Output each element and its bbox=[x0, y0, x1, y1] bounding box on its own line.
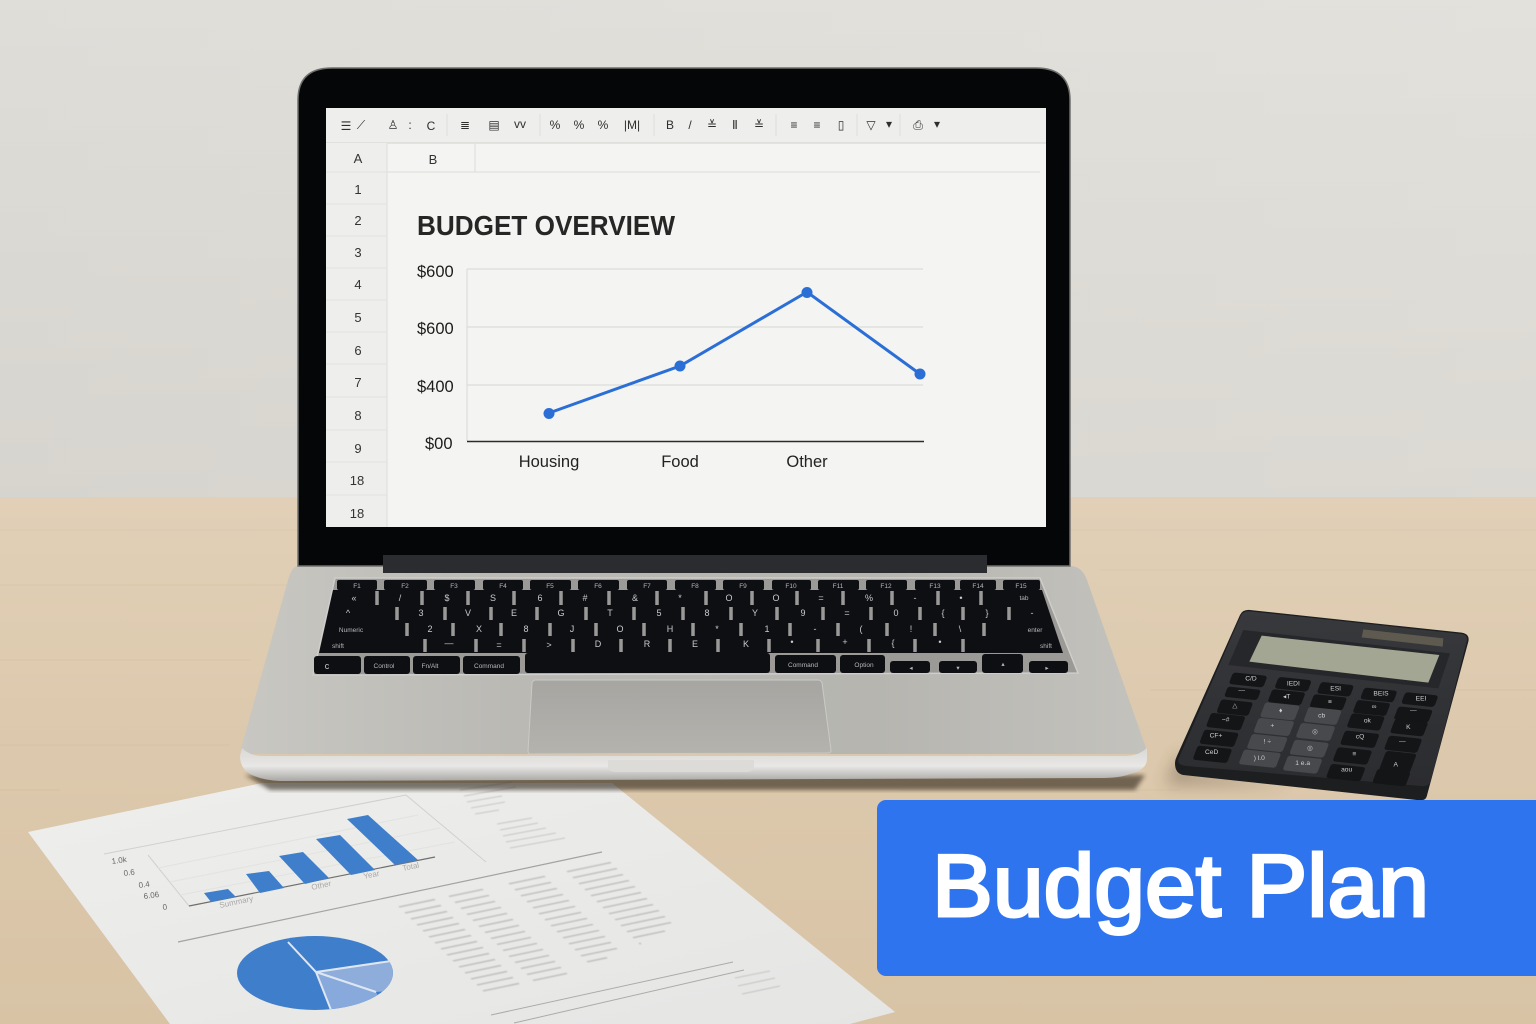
key labels: H bbox=[667, 624, 673, 634]
key labels: - bbox=[914, 593, 916, 603]
key labels: ◂ bbox=[909, 665, 913, 672]
calculator key labels: ) l.0 bbox=[1254, 755, 1265, 762]
line chart: Housing bbox=[519, 453, 579, 471]
key labels: = bbox=[844, 608, 850, 618]
key labels: - bbox=[814, 624, 816, 634]
spreadsheet toolbar: ≚ bbox=[707, 118, 717, 132]
function row keys bbox=[337, 580, 1040, 590]
calculator key labels: EEI bbox=[1416, 695, 1427, 702]
key labels: \ bbox=[959, 624, 962, 634]
key labels: F6 bbox=[594, 583, 602, 590]
pie chart on paper bbox=[237, 936, 393, 1010]
spreadsheet toolbar bbox=[326, 108, 1046, 143]
key labels: — bbox=[444, 638, 454, 648]
spreadsheet headers: 8 bbox=[354, 408, 362, 423]
key labels: R bbox=[644, 639, 651, 649]
laptop shadow bbox=[245, 775, 1145, 790]
key labels: / bbox=[399, 593, 402, 603]
key separators bbox=[377, 591, 1009, 652]
key labels: G bbox=[557, 608, 565, 618]
key labels: 5 bbox=[656, 608, 662, 618]
line chart: $400 bbox=[417, 378, 454, 396]
key labels: Option bbox=[854, 662, 874, 669]
key labels: • bbox=[959, 593, 963, 603]
data table on paper bbox=[399, 782, 780, 994]
key labels: O bbox=[772, 593, 780, 603]
calculator key labels: ◎ bbox=[1312, 728, 1318, 735]
calculator shadow bbox=[1165, 750, 1290, 785]
bar chart on paper: 0 bbox=[162, 902, 168, 912]
bar chart on paper bbox=[104, 795, 486, 912]
spreadsheet toolbar: Ⅱ bbox=[732, 118, 738, 132]
key labels: ( bbox=[860, 624, 862, 634]
table footer lines bbox=[491, 962, 744, 1023]
line chart bbox=[417, 263, 926, 471]
key labels: > bbox=[546, 640, 552, 650]
key labels: F8 bbox=[691, 583, 699, 590]
spreadsheet toolbar: ≣ bbox=[460, 118, 470, 132]
bar chart on paper: 0.6 bbox=[123, 867, 136, 878]
key labels: Fn/Alt bbox=[422, 663, 439, 670]
key labels: F14 bbox=[972, 583, 984, 590]
key labels: Control bbox=[374, 663, 395, 670]
key labels: shift bbox=[332, 643, 344, 650]
key labels: } bbox=[985, 608, 989, 618]
spreadsheet toolbar: ☰ bbox=[341, 119, 351, 133]
key labels: 3 bbox=[418, 608, 424, 618]
key labels: # bbox=[582, 593, 588, 603]
key labels: { bbox=[891, 638, 895, 648]
spreadsheet headers: 3 bbox=[354, 245, 362, 260]
spreadsheet toolbar: B bbox=[666, 118, 674, 132]
calculator key labels: ~# bbox=[1222, 717, 1230, 724]
spreadsheet headers: 9 bbox=[354, 441, 362, 456]
calculator key labels: aou bbox=[1341, 767, 1353, 774]
key labels: F13 bbox=[929, 583, 941, 590]
calculator key labels: ≡ bbox=[1352, 751, 1356, 758]
key labels: Numeric bbox=[339, 627, 364, 634]
spreadsheet toolbar: ♙ bbox=[388, 118, 398, 132]
key labels: F4 bbox=[499, 583, 507, 590]
key labels: F2 bbox=[401, 583, 409, 590]
spreadsheet headers: 4 bbox=[354, 277, 362, 292]
front lip bbox=[240, 748, 1147, 781]
key labels bbox=[325, 583, 1052, 672]
key labels: tab bbox=[1019, 595, 1029, 602]
hinge bbox=[383, 555, 987, 573]
key labels: $ bbox=[444, 593, 450, 603]
wall background bbox=[0, 0, 1536, 498]
key labels: E bbox=[511, 608, 517, 618]
divider on paper bbox=[178, 852, 602, 942]
banner title: Budget Plan bbox=[932, 836, 1429, 935]
key labels: D bbox=[595, 639, 602, 649]
key labels: 2 bbox=[427, 624, 433, 634]
calculator key labels: A bbox=[1393, 762, 1398, 769]
key labels: F7 bbox=[643, 583, 651, 590]
key labels: - bbox=[1030, 608, 1034, 618]
key labels: * bbox=[678, 593, 682, 603]
spreadsheet headers: 5 bbox=[354, 310, 362, 325]
spreadsheet toolbar: C bbox=[427, 119, 436, 133]
blue title banner bbox=[877, 800, 1536, 976]
calculator key labels: ◎ bbox=[1307, 745, 1313, 752]
key labels: S bbox=[490, 593, 496, 603]
spreadsheet headers: A bbox=[354, 151, 363, 166]
key labels: 6 bbox=[537, 593, 543, 603]
spreadsheet toolbar: vv bbox=[514, 117, 526, 131]
key labels: ▾ bbox=[956, 665, 960, 672]
spreadsheet toolbar: / bbox=[688, 118, 692, 132]
bar chart on paper: Summary bbox=[219, 894, 254, 910]
calculator key labels: — bbox=[1238, 688, 1245, 695]
line chart: $00 bbox=[425, 435, 453, 453]
laptop base bbox=[240, 566, 1147, 781]
key labels: X bbox=[476, 624, 482, 634]
spreadsheet headers: 7 bbox=[354, 375, 362, 390]
calculator key labels: 1 e.a bbox=[1295, 760, 1310, 767]
calculator key labels: BEIS bbox=[1373, 691, 1389, 698]
key labels: F11 bbox=[833, 583, 844, 590]
bar chart on paper: Total bbox=[402, 861, 420, 873]
key labels: F12 bbox=[880, 583, 892, 590]
key labels: * bbox=[715, 624, 719, 634]
spreadsheet headers: 2 bbox=[354, 213, 362, 228]
calculator key labels: ≡ bbox=[1328, 698, 1332, 705]
key labels: Command bbox=[474, 663, 504, 670]
key labels: F5 bbox=[546, 583, 554, 590]
calculator key labels: C/D bbox=[1245, 676, 1257, 683]
key labels: 9 bbox=[800, 608, 806, 618]
spreadsheet toolbar: % bbox=[598, 118, 609, 132]
calculator key labels: ♦ bbox=[1279, 707, 1283, 714]
spreadsheet toolbar: ⎙ bbox=[913, 118, 923, 132]
line chart: $600 bbox=[417, 263, 454, 281]
spreadsheet headers: 18 bbox=[350, 506, 364, 521]
calculator key labels: ESI bbox=[1330, 685, 1341, 692]
keyboard bbox=[313, 578, 1078, 675]
calculator key labels: + bbox=[1270, 723, 1274, 730]
key labels: 0 bbox=[893, 608, 899, 618]
key labels: K bbox=[743, 639, 749, 649]
wooden desk bbox=[0, 497, 1536, 1024]
key labels: Y bbox=[752, 608, 758, 618]
key labels: E bbox=[692, 639, 698, 649]
key labels: O bbox=[725, 593, 733, 603]
spreadsheet toolbar: % bbox=[550, 118, 561, 132]
calculator key labels: K bbox=[1406, 724, 1411, 731]
sheet of paper bbox=[28, 783, 895, 1024]
spreadsheet toolbar: ▤ bbox=[488, 118, 500, 132]
bar chart on paper: 1.0k bbox=[111, 855, 128, 866]
line chart: Other bbox=[786, 453, 828, 471]
key labels: « bbox=[351, 593, 357, 603]
key labels: 8 bbox=[523, 624, 529, 634]
key labels: V bbox=[465, 608, 471, 618]
calculator key labels: CF+ bbox=[1210, 732, 1222, 739]
line chart: Food bbox=[661, 453, 699, 471]
key labels: F1 bbox=[353, 583, 361, 590]
key labels: + bbox=[842, 637, 848, 647]
calculator key labels: IEDI bbox=[1287, 680, 1300, 687]
calculator key labels: CeD bbox=[1205, 749, 1219, 756]
key labels: O bbox=[616, 624, 624, 634]
spreadsheet toolbar: ≚ bbox=[754, 118, 764, 132]
key labels: % bbox=[865, 593, 873, 603]
key labels: F10 bbox=[785, 583, 797, 590]
spreadsheet headers bbox=[326, 143, 1040, 527]
key labels: shift bbox=[1040, 643, 1052, 650]
calculator bbox=[1175, 610, 1469, 800]
key labels: F9 bbox=[739, 583, 747, 590]
spreadsheet toolbar: ▾ bbox=[886, 117, 892, 131]
spreadsheet headers: 6 bbox=[354, 343, 362, 358]
screen bbox=[326, 108, 1046, 527]
key labels: F3 bbox=[450, 583, 458, 590]
key labels: ▸ bbox=[1045, 665, 1049, 672]
calculator key labels: cQ bbox=[1356, 733, 1364, 740]
calculator key labels: ! ÷ bbox=[1264, 738, 1271, 745]
key labels: & bbox=[632, 593, 638, 603]
key labels: c bbox=[325, 661, 330, 671]
calculator key labels bbox=[1205, 676, 1427, 774]
calculator key labels: — bbox=[1410, 708, 1417, 715]
solar cell bbox=[1362, 629, 1443, 647]
key labels: Command bbox=[788, 662, 818, 669]
spreadsheet toolbar: |M| bbox=[624, 118, 640, 132]
screen lid bbox=[298, 68, 1070, 573]
key labels: ! bbox=[910, 624, 912, 634]
bar chart on paper: Other bbox=[311, 879, 332, 892]
spreadsheet headers: B bbox=[429, 152, 437, 167]
spreadsheet toolbar: ≡ bbox=[813, 118, 821, 132]
spreadsheet toolbar: ⟋ bbox=[357, 118, 366, 132]
key labels: 8 bbox=[704, 608, 710, 618]
key labels: ▴ bbox=[1001, 661, 1005, 668]
calculator key labels: ok bbox=[1364, 718, 1372, 725]
spreadsheet toolbar: ≡ bbox=[790, 118, 798, 132]
front notch bbox=[608, 760, 754, 772]
display bbox=[1228, 630, 1450, 688]
calculator key labels: ◂T bbox=[1283, 693, 1290, 700]
line chart: $600 bbox=[417, 320, 454, 338]
spreadsheet toolbar: ▯ bbox=[838, 118, 844, 132]
key labels: enter bbox=[1028, 627, 1043, 634]
printed report sheet bbox=[28, 782, 895, 1024]
key labels: = bbox=[818, 593, 824, 603]
spreadsheet toolbar: ▾ bbox=[934, 117, 940, 131]
spreadsheet headers: 1 bbox=[354, 182, 362, 197]
calculator body bbox=[1175, 610, 1469, 800]
calculator keys bbox=[1192, 672, 1439, 786]
key labels: J bbox=[570, 624, 574, 634]
key labels: = bbox=[496, 640, 502, 650]
bar chart on paper: Year bbox=[363, 869, 381, 881]
calculator key labels: ∞ bbox=[1372, 703, 1377, 710]
key labels: • bbox=[938, 637, 942, 647]
calculator key labels: cb bbox=[1318, 712, 1325, 719]
calculator key labels: — bbox=[1399, 738, 1406, 745]
key labels: T bbox=[607, 608, 613, 618]
trackpad bbox=[528, 680, 831, 754]
key labels: 1 bbox=[764, 624, 770, 634]
spreadsheet toolbar: % bbox=[574, 118, 585, 132]
bottom row keys bbox=[314, 653, 1068, 674]
key labels: F15 bbox=[1015, 583, 1027, 590]
key labels: ^ bbox=[346, 608, 351, 618]
bar chart on paper: 6.06 bbox=[143, 890, 160, 901]
laptop bbox=[240, 68, 1147, 781]
spreadsheet toolbar: ▽ bbox=[866, 118, 876, 132]
spreadsheet toolbar: : bbox=[408, 118, 412, 132]
chart title: BUDGET OVERVIEW bbox=[417, 210, 676, 241]
key labels: • bbox=[790, 637, 794, 647]
key labels: { bbox=[941, 608, 945, 618]
spreadsheet headers: 18 bbox=[350, 473, 364, 488]
calculator key labels: △ bbox=[1232, 703, 1238, 710]
bar chart on paper: 0.4 bbox=[138, 879, 151, 890]
